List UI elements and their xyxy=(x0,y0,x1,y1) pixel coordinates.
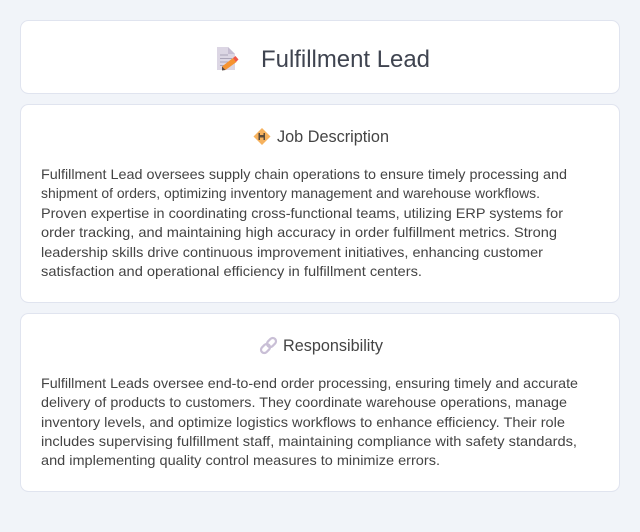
panel: responsibility xyxy=(20,314,620,492)
text block: job description: Fulfillment Lead oversees supply chain operations to ensure timely processing and xyxy=(41,166,567,182)
text block: responsibility: Fulfillment Leads oversee end-to-end order processing, ensuring timely and accurate xyxy=(41,375,578,391)
text block: responsibility xyxy=(41,375,578,468)
title: Fulfillment Lead xyxy=(261,46,430,73)
text block: job description: Proven expertise in coordinating cross-functional teams, utilizing ERP systems for xyxy=(41,205,563,221)
text block: job description: leadership skills drive continuous improvement initiatives, enhancing customer xyxy=(41,244,543,260)
text block: responsibility: and implementing quality control measures to minimize errors. xyxy=(41,452,440,468)
heading: responsibility: Responsibility xyxy=(283,337,384,355)
text block: job description: satisfaction and operational efficiency in fulfillment centers. xyxy=(41,263,422,279)
text block: responsibility: includes supervising fulfillment staff, maintaining compliance with safety standards, xyxy=(41,433,577,449)
text block: responsibility: delivery of products to customers. They coordinate warehouse operations, manage xyxy=(41,394,567,410)
icon: road sign xyxy=(254,128,270,145)
icon: document with pencil xyxy=(217,47,238,70)
text block: job description: order tracking, and maintaining high accuracy in order fulfillment metrics. Strong xyxy=(41,224,557,240)
text block: job description: shipment of orders, optimizing inventory management and warehouse workflows. xyxy=(41,185,540,201)
text block: job description xyxy=(41,166,567,279)
panel: title xyxy=(20,20,620,94)
text block: responsibility: inventory levels, and optimize logistics workflows to enhance efficiency. Their role xyxy=(41,414,565,430)
panel: job description xyxy=(20,104,620,302)
icon: chain link xyxy=(260,337,277,354)
heading: job description: Job Description xyxy=(277,128,389,146)
